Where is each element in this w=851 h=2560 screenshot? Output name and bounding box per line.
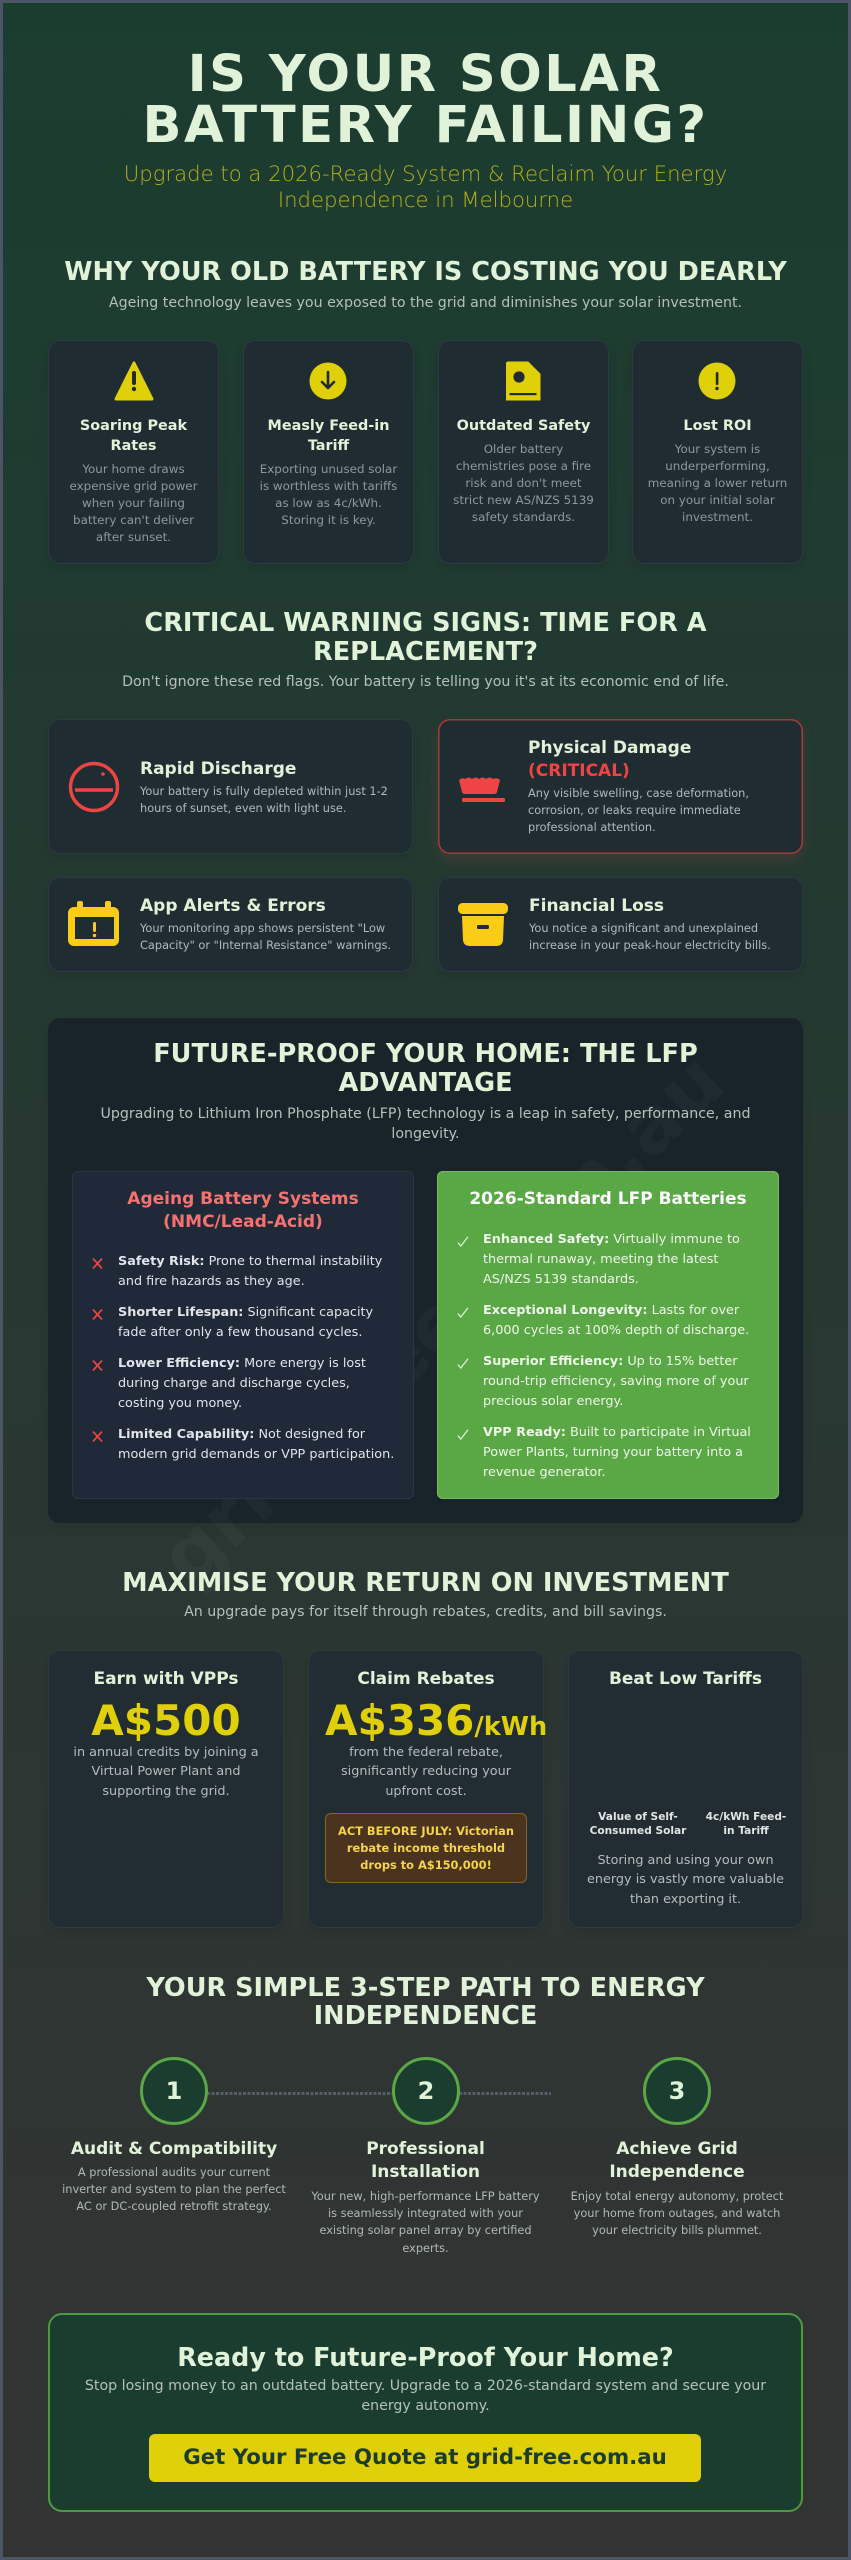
list item: safety risk: and fire hazards as they age. — [118, 1274, 305, 1289]
chart label: self-consumed — [588, 1810, 688, 1838]
warning text: professional attention. — [528, 820, 656, 834]
step title — [561, 2138, 793, 2184]
warning text — [140, 921, 391, 952]
list item: VPP ready: VPP Ready: Built to participate in Virtual — [483, 1425, 751, 1440]
list item: enhanced safety: thermal runaway, meeting the latest — [483, 1252, 718, 1267]
list item: superior efficiency: precious solar energy. — [483, 1394, 623, 1409]
step text: inverter and system to plan the perfect — [62, 2182, 286, 2196]
mark: cross — [92, 1258, 103, 1269]
card text: from the federal rebate, — [349, 1744, 503, 1760]
section intro: why your old battery: Ageing technology leaves you exposed to the grid and diminishes your solar investment. — [109, 295, 742, 311]
step title: Achieve Grid — [616, 2139, 738, 2159]
step text: is seamlessly integrated with your — [328, 2206, 523, 2220]
card: rapid discharge — [48, 719, 413, 854]
list item: shorter lifespan: fade after only a few thousand cycles. — [118, 1325, 362, 1340]
heading: LFP advantage: FUTURE-PROOF YOUR HOME: THE LFP — [153, 1039, 698, 1069]
card text: when your failing — [82, 496, 185, 510]
step text: Your new, high-performance LFP battery — [311, 2189, 540, 2203]
list item: safety risk — [118, 1254, 382, 1289]
icon: red circle with bar — [68, 762, 120, 812]
button — [149, 2434, 701, 2482]
heading: LFP advantage: ADVANTAGE — [338, 1068, 513, 1098]
list item: limited capability: modern grid demands or VPP participation. — [118, 1447, 394, 1462]
card: lost ROI — [632, 340, 803, 564]
warning text: Your monitoring app shows persistent "Low — [140, 921, 385, 935]
warning text: increase in your peak-hour electricity bills. — [529, 938, 771, 952]
step number: 3 — [669, 2077, 685, 2105]
title: IS YOUR SOLAR — [188, 44, 663, 104]
card title: Tariff — [308, 438, 349, 454]
mark: cross — [92, 1431, 103, 1442]
list item: lower efficiency — [118, 1356, 366, 1411]
chart label: feed-in tariff: in Tariff — [723, 1825, 769, 1837]
card text: than exporting it. — [630, 1892, 741, 1907]
heading: why your old battery: WHY YOUR OLD BATTERY IS COSTING YOU DEARLY — [64, 257, 787, 287]
step text: A professional audits your current — [78, 2165, 270, 2179]
subtitle: Independence in Melbourne — [278, 187, 573, 212]
warning text — [140, 784, 388, 815]
warning title — [528, 738, 691, 781]
list item: enhanced safety: Enhanced Safety: Virtually immune to — [483, 1232, 740, 1247]
list item: superior efficiency: Superior Efficiency: Up to 15% better — [483, 1354, 737, 1369]
card text — [48, 1742, 284, 1802]
section intro: LFP — [100, 1106, 750, 1142]
step 2 — [309, 2057, 542, 2257]
icon: archive box — [458, 903, 508, 946]
card text: Exporting unused solar — [260, 462, 397, 476]
warning text: Your battery is fully depleted within just 1-2 — [140, 784, 388, 798]
card text: risk and don't meet — [465, 476, 582, 490]
section intro: LFP: longevity. — [391, 1126, 460, 1142]
card text: Your home draws — [82, 462, 185, 476]
step number — [392, 2057, 460, 2125]
step title: Audit & Compatibility — [71, 2139, 277, 2159]
card text — [260, 462, 398, 527]
card text: on your initial solar — [660, 493, 775, 507]
card title: Beat Low Tariffs — [609, 1669, 762, 1689]
step 1 — [58, 2057, 290, 2217]
step text: experts. — [402, 2241, 449, 2255]
column heading: Ageing Battery Systems — [127, 1189, 359, 1209]
card: outdated safety — [438, 340, 609, 564]
card text: upfront cost. — [385, 1784, 467, 1799]
card text: in annual credits by joining a — [73, 1744, 259, 1760]
card title: Rates — [110, 438, 156, 454]
warning text: Capacity" or "Internal Resistance" warnings. — [140, 938, 391, 952]
chart label: feed-in tariff — [696, 1810, 796, 1838]
heading: LFP advantage — [153, 1039, 698, 1098]
subtitle: Upgrade to a 2026-Ready System & Reclaim Your Energy — [124, 161, 727, 186]
mark: check — [457, 1236, 468, 1247]
list item: VPP ready — [483, 1425, 751, 1480]
step title: Installation — [371, 2162, 480, 2182]
icon: document disk — [506, 362, 540, 400]
step text — [309, 2188, 542, 2257]
list item: exceptional longevity: 6,000 cycles at 100% depth of discharge. — [483, 1323, 749, 1338]
step title: Professional — [366, 2139, 485, 2159]
title: BATTERY FAILING? — [142, 95, 709, 155]
icon: warning triangle — [114, 361, 154, 400]
panel: LFP advantage — [48, 1018, 803, 1523]
callout: act before July — [325, 1813, 527, 1883]
warning title: Physical Damage — [528, 738, 691, 758]
list item: exceptional longevity: Exceptional Longevity: Lasts for over — [483, 1303, 739, 1318]
card: earn with VPPs — [48, 1650, 284, 1928]
card text: investment. — [682, 510, 753, 524]
step title: Independence — [609, 2162, 745, 2182]
list item: superior efficiency — [483, 1354, 749, 1409]
column heading: 2026-Standard LFP Batteries — [469, 1189, 747, 1209]
big number: A$336/kWh — [325, 1696, 547, 1745]
list item: limited capability — [118, 1427, 394, 1462]
warning text: You notice a significant and unexplained — [529, 921, 758, 935]
list item: enhanced safety: AS/NZS 5139 standards. — [483, 1272, 639, 1287]
list item: lower efficiency: costing you money. — [118, 1396, 242, 1411]
subtitle — [124, 161, 727, 212]
mark: cross — [92, 1309, 103, 1320]
heading: three step path — [0, 1974, 851, 2031]
warning title: (CRITICAL) — [528, 761, 630, 781]
heading: critical warning signs: CRITICAL WARNING SIGNS: TIME FOR A — [144, 608, 707, 638]
card title: Claim Rebates — [357, 1669, 495, 1689]
card text: supporting the grid. — [102, 1784, 230, 1799]
warning text — [528, 786, 749, 834]
mark: cross — [92, 1360, 103, 1371]
card: physical damage critical — [438, 719, 803, 854]
card text: meaning a lower return — [648, 476, 787, 490]
heading: three step path: YOUR SIMPLE 3-STEP PATH TO ENERGY — [146, 1972, 705, 2002]
list item: superior efficiency: round-trip efficiency, saving more of your — [483, 1374, 749, 1389]
card title — [80, 418, 188, 454]
card title — [268, 418, 389, 454]
card text: underperforming, — [665, 459, 770, 473]
list item: exceptional longevity — [483, 1303, 749, 1338]
step text — [58, 2164, 290, 2216]
card text: expensive grid power — [70, 479, 198, 493]
call to action text: Stop losing money to an outdated battery. Upgrade to a 2026-standard system and secure your — [85, 2378, 766, 2394]
card text: safety standards. — [472, 510, 575, 524]
step number: 2 — [418, 2077, 434, 2105]
callout: act before July: drops to A$150,000! — [360, 1858, 492, 1872]
card text — [453, 442, 594, 524]
card: financial loss — [438, 877, 803, 972]
warning text: Any visible swelling, case deformation, — [528, 786, 749, 800]
card title: Earn with VPPs — [93, 1669, 239, 1689]
card title: Lost ROI — [683, 418, 752, 434]
callout: act before July: rebate income threshold — [347, 1841, 505, 1855]
card text: Older battery — [484, 442, 563, 456]
heading: critical warning signs — [144, 608, 707, 667]
chart label: feed-in tariff: 4c/kWh Feed- — [706, 1811, 786, 1823]
card text: Virtual Power Plant and — [91, 1764, 241, 1779]
mark: check — [457, 1358, 468, 1369]
card text: after sunset. — [96, 530, 171, 544]
list item: limited capability: Limited Capability: Not designed for — [118, 1427, 365, 1442]
card title: Soaring Peak — [80, 418, 187, 434]
list item: lower efficiency: Lower Efficiency: More energy is lost — [118, 1356, 366, 1371]
icon: down arrow circle — [310, 362, 346, 400]
mark: check — [457, 1429, 469, 1440]
card text: Storing it is key. — [281, 513, 376, 527]
column: LFP batteries — [437, 1171, 779, 1499]
section intro: return: An upgrade pays for itself through rebates, credits, and bill savings. — [184, 1604, 667, 1620]
list item: VPP ready: Power Plants, turning your battery into a — [483, 1445, 743, 1460]
step text: existing solar panel array by certified — [319, 2223, 532, 2237]
card text: as low as 4c/kWh. — [275, 496, 382, 510]
call to action text: energy autonomy. — [361, 2398, 490, 2414]
heading: critical warning signs: REPLACEMENT? — [313, 637, 538, 667]
list item: lower efficiency: during charge and discharge cycles, — [118, 1376, 350, 1391]
warning title: App Alerts & Errors — [140, 896, 326, 916]
card: beat low tariffs — [568, 1650, 803, 1928]
card text — [648, 442, 787, 524]
card title: Outdated Safety — [457, 418, 590, 434]
card text — [308, 1742, 544, 1802]
warning title: Rapid Discharge — [140, 758, 296, 778]
mark: check — [457, 1308, 468, 1318]
button: Get Your Free Quote at grid-free.com.au — [183, 2445, 667, 2470]
step text — [561, 2188, 793, 2240]
card text: battery can't deliver — [73, 513, 194, 527]
list item: enhanced safety — [483, 1232, 740, 1287]
column heading: (NMC/Lead-Acid) — [163, 1212, 323, 1232]
icon: swollen battery — [459, 778, 505, 802]
card text: Your system is — [675, 442, 760, 456]
warning text: corrosion, or leaks require immediate — [528, 803, 741, 817]
list item: VPP ready: revenue generator. — [483, 1465, 606, 1480]
icon: calendar alert — [68, 901, 119, 946]
card title: Measly Feed-in — [268, 418, 389, 434]
list item: shorter lifespan — [118, 1305, 373, 1340]
call to action heading: Ready to Future-Proof Your Home? — [177, 2342, 674, 2372]
card: app alerts and errors — [48, 877, 413, 972]
heading: maximise return: MAXIMISE YOUR RETURN ON INVESTMENT — [122, 1568, 729, 1598]
dotted connector line — [207, 2092, 551, 2095]
step number: 1 — [166, 2077, 182, 2105]
warning text: hours of sunset, even with light use. — [140, 801, 346, 815]
watermark: grid-free.com.au — [142, 1036, 742, 1604]
heading: three step path: INDEPENDENCE — [314, 2001, 537, 2031]
step text: AC or DC-coupled retrofit strategy. — [76, 2199, 272, 2213]
step title — [309, 2138, 542, 2184]
card text: significantly reducing your — [341, 1764, 511, 1779]
card text — [70, 462, 198, 544]
step number — [643, 2057, 711, 2125]
list item: safety risk: Safety Risk: Prone to thermal instability — [118, 1254, 382, 1269]
chart label: self-consumed: Consumed Solar — [590, 1825, 686, 1837]
card text: is worthless with tariffs — [260, 479, 397, 493]
card: measly feed-in tariff — [243, 340, 414, 564]
step number — [140, 2057, 208, 2125]
card text: chemistries pose a fire — [456, 459, 591, 473]
call to action text — [50, 2376, 801, 2416]
card text: energy is vastly more valuable — [587, 1872, 784, 1887]
big number: A$500 — [91, 1696, 241, 1745]
column: ageing battery systems — [72, 1171, 414, 1499]
card text: Storing and using your own — [597, 1852, 774, 1868]
step 3 — [561, 2057, 793, 2247]
chart label: self-consumed: Value of Self- — [598, 1811, 678, 1823]
card text — [568, 1850, 803, 1910]
card text: strict new AS/NZS 5139 — [453, 493, 594, 507]
step text: your home from outages, and watch — [574, 2206, 780, 2220]
card: claim rebates — [308, 1650, 544, 1928]
warning text — [529, 921, 771, 952]
step text: Enjoy total energy autonomy, protect — [571, 2189, 783, 2203]
panel: call to action — [48, 2313, 803, 2512]
step text: your electricity bills plummet. — [592, 2223, 762, 2237]
card: soaring peak rates — [48, 340, 219, 564]
warning title: Financial Loss — [529, 896, 664, 916]
column heading — [127, 1189, 359, 1232]
section intro: LFP: Upgrading to Lithium Iron Phosphate (LFP) technology is a leap in safety, performance, and — [100, 1106, 750, 1122]
section intro: warning signs: Don't ignore these red flags. Your battery is telling you it's at its economic end of life. — [122, 674, 729, 690]
callout: act before July: ACT BEFORE JULY: Victorian — [338, 1824, 514, 1838]
title — [142, 44, 709, 155]
list item: shorter lifespan: Shorter Lifespan: Significant capacity — [118, 1305, 373, 1320]
icon: exclamation circle — [698, 362, 736, 400]
